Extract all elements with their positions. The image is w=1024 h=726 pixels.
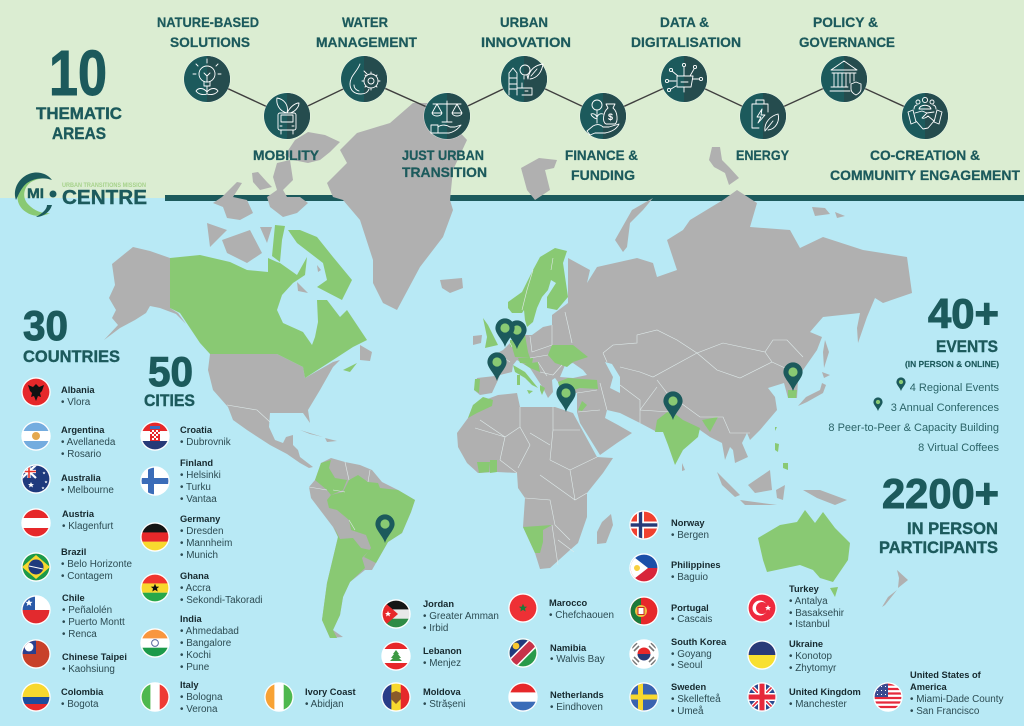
country: Ghana	[140, 572, 262, 603]
cities: • Abidjan	[305, 699, 344, 710]
cities: Sweden	[671, 682, 706, 692]
icon: city, bulb and leaf	[500, 56, 548, 102]
cities: • Munich	[180, 550, 218, 561]
cities: • Renca	[62, 629, 97, 640]
theme: Urban innovation	[481, 14, 571, 102]
cities: Portugal	[671, 603, 709, 613]
country: Philippines	[629, 553, 721, 583]
flag: Turkey	[747, 593, 777, 623]
flag: Germany	[140, 522, 170, 552]
headline: 10 thematic areas: AREAS	[52, 125, 106, 143]
flag: Ivory Coast	[264, 682, 294, 712]
flag: Marocco	[508, 593, 538, 623]
cities: Netherlands	[550, 690, 604, 700]
flag: Namibia	[508, 638, 538, 668]
cities: • Eindhoven	[550, 702, 603, 713]
cities: Chile	[62, 593, 85, 603]
header background	[0, 0, 1024, 198]
theme: Data and digitalisation	[631, 14, 741, 102]
label: JUST URBAN	[402, 147, 484, 163]
cities: United Kingdom	[789, 687, 861, 697]
theme: Policy and governance	[799, 14, 895, 102]
logo: MI Centre: URBAN TRANSITIONS MISSION	[62, 183, 146, 189]
cities: • Bogota	[61, 699, 99, 710]
pin: India	[663, 391, 683, 420]
panel: participants	[879, 470, 999, 557]
cities: Philippines	[671, 560, 721, 570]
cities: America	[910, 682, 948, 692]
cities: Chinese Taipei	[62, 652, 127, 662]
icon: bank and shield	[820, 56, 868, 102]
country: Ukraine	[747, 639, 837, 674]
cities: Colombia	[61, 687, 104, 697]
cities: • Sekondi-Takoradi	[180, 595, 262, 606]
cities: United States of	[910, 670, 982, 680]
sea background	[0, 198, 1024, 726]
label: ENERGY	[736, 147, 790, 163]
country: Jordan	[381, 599, 499, 634]
label: MOBILITY	[253, 147, 320, 163]
pin: Spain	[487, 352, 507, 381]
logo: MI Centre: CENTRE	[62, 187, 147, 209]
country: Austria	[21, 508, 113, 538]
flag: Chile	[21, 595, 51, 625]
cities: • Istanbul	[789, 619, 830, 630]
cities: • Peñalolén	[62, 605, 112, 616]
icon: water drop and gear	[340, 56, 388, 102]
cities: • Rosario	[61, 449, 102, 460]
cities: • Bergen	[671, 530, 709, 541]
pin: UK	[507, 320, 527, 349]
country: Moldova	[381, 682, 465, 712]
cities: Ivory Coast	[305, 687, 356, 697]
label: URBAN	[500, 14, 548, 30]
country: United States of America	[873, 670, 1004, 717]
cities: • Verona	[180, 704, 218, 715]
flag: Italy	[140, 682, 170, 712]
cities: • Chefchaouen	[549, 610, 614, 621]
events list: 3 Annual Conferences	[891, 402, 999, 414]
flag: Netherlands	[508, 682, 538, 712]
cities: • Greater Amman	[423, 611, 499, 622]
headline: 10 thematic areas: 10	[49, 37, 107, 109]
headline: 50 cities	[144, 348, 195, 410]
cities: • Melbourne	[61, 485, 114, 496]
headline: 30 countries	[23, 302, 120, 366]
map pins	[375, 318, 803, 543]
headline: 30 countries: 30	[23, 302, 68, 349]
cities: South Korea	[671, 637, 727, 647]
cities: • Mannheim	[180, 538, 232, 549]
country: Netherlands	[508, 682, 604, 713]
country: Norway	[629, 510, 709, 541]
country: South Korea	[629, 637, 727, 671]
icon: scales on hand	[424, 92, 470, 140]
cities: • Klagenfurt	[62, 521, 113, 532]
cities: • Konotop	[789, 651, 832, 662]
cities: Moldova	[423, 687, 462, 697]
flag: Albania	[21, 377, 51, 407]
country: Brazil	[21, 547, 132, 582]
cities: Marocco	[549, 598, 588, 608]
cities: • Bangalore	[180, 638, 232, 649]
cities: • Walvis Bay	[550, 654, 605, 665]
cities: Croatia	[180, 425, 213, 435]
icon: battery and leaf	[740, 92, 786, 140]
cities: Jordan	[423, 599, 454, 609]
cities: • San Francisco	[910, 706, 980, 717]
flag: Australia	[21, 464, 51, 494]
headline: 10 thematic areas	[36, 37, 122, 143]
map: gray land	[104, 103, 912, 638]
cities: • Basaksehir	[789, 608, 845, 619]
cities: • Avellaneda	[61, 437, 116, 448]
connector line between theme circles	[207, 79, 925, 116]
cities: • Dresden	[180, 526, 224, 537]
cities: • Vlora	[61, 397, 91, 408]
cities: Namibia	[550, 643, 587, 653]
label: NATURE-BASED	[157, 14, 259, 30]
cities: • Miami-Dade County	[910, 694, 1004, 705]
cities: • Skellefteå	[671, 694, 721, 705]
panel: events	[828, 290, 999, 454]
icon: bus and leaf	[264, 92, 310, 140]
cities: Ukraine	[789, 639, 823, 649]
flag: Colombia	[21, 682, 51, 712]
pin: Eastern Mediterranean	[556, 383, 576, 412]
cities: Lebanon	[423, 646, 462, 656]
cities: • Menjez	[423, 658, 461, 669]
label: POLICY &	[813, 14, 878, 30]
cities: • Accra	[180, 583, 211, 594]
map: participating countries	[170, 225, 850, 638]
country: United Kingdom	[747, 682, 861, 712]
cities: • Kaohsiung	[62, 664, 115, 675]
label: WATER	[342, 14, 388, 30]
pin: Germany	[495, 318, 515, 347]
cities: • Bologna	[180, 692, 223, 703]
flag: Sweden	[629, 682, 659, 712]
icon: bulb and plant	[184, 56, 230, 102]
country: Germany	[140, 514, 232, 561]
label: INNOVATION	[481, 34, 571, 50]
theme: Co-creation and community engagement	[830, 92, 1020, 183]
country: Australia	[21, 464, 114, 496]
headline: 50 cities: CITIES	[144, 392, 195, 410]
country: Ivory Coast	[264, 682, 356, 712]
cities: • Pune	[180, 662, 210, 673]
cities: Ghana	[180, 571, 210, 581]
cities: • Belo Horizonte	[61, 559, 132, 570]
theme: Energy	[736, 92, 790, 163]
cities: • Puerto Montt	[62, 617, 125, 628]
cities: • Contagem	[61, 571, 113, 582]
panel: participants: 2200+	[882, 470, 999, 517]
flag: Croatia	[140, 421, 170, 451]
pin: South Korea	[783, 362, 803, 391]
cities: • Strășeni	[423, 699, 465, 710]
events count: 40+	[928, 290, 999, 337]
cities: Albania	[61, 385, 95, 395]
theme: Mobility	[253, 92, 320, 163]
logo: MI Centre	[15, 173, 147, 217]
world map	[104, 103, 912, 638]
country: Argentina	[21, 421, 116, 460]
cities: • Antalya	[789, 596, 828, 607]
label: COMMUNITY ENGAGEMENT	[830, 167, 1020, 183]
flag: Ghana	[140, 573, 170, 603]
cities: India	[180, 614, 203, 624]
country: Colombia	[21, 682, 104, 712]
cities: • Turku	[180, 482, 211, 493]
flag: Finland	[140, 466, 170, 496]
country: India	[140, 614, 239, 673]
cities: Argentina	[61, 425, 105, 435]
cities: • Umeå	[671, 706, 704, 717]
cities: • Manchester	[789, 699, 848, 710]
cities: • Ahmedabad	[180, 626, 239, 637]
theme: Nature-based solutions	[157, 14, 259, 102]
cities: • Irbid	[423, 623, 448, 634]
country: Lebanon	[381, 641, 462, 671]
cities: • Dubrovnik	[180, 437, 231, 448]
flag: Austria	[21, 508, 51, 538]
cities: Italy	[180, 680, 199, 690]
flag: Philippines	[629, 553, 659, 583]
flag: Jordan	[381, 599, 411, 629]
flag: Lebanon	[381, 641, 411, 671]
country: Chile	[21, 593, 125, 640]
label: MANAGEMENT	[316, 34, 417, 50]
cities: • Seoul	[671, 660, 702, 671]
events list: 4 Regional Events	[910, 382, 999, 394]
headline: 10 thematic areas: THEMATIC	[36, 105, 122, 123]
country: Namibia	[508, 638, 605, 668]
icon: people and handshake	[902, 92, 948, 140]
cities: • Goyang	[671, 649, 712, 660]
country: Sweden	[629, 682, 721, 717]
logo: MI Centre: MI	[27, 186, 44, 201]
label: GOVERNANCE	[799, 34, 895, 50]
panel: participants: IN PERSON	[907, 520, 998, 538]
cities: • Cascais	[671, 614, 712, 625]
headline: 50 cities: 50	[148, 348, 193, 395]
cities: • Kochi	[180, 650, 211, 661]
country: Albania	[21, 377, 95, 408]
label: FUNDING	[571, 167, 635, 183]
icon: small pin	[873, 397, 883, 411]
icon: small pin	[896, 377, 906, 391]
flag: Chinese Taipei	[21, 639, 51, 669]
cities: Germany	[180, 514, 221, 524]
map: country borders	[227, 258, 803, 565]
theme: Just urban transition	[402, 92, 487, 180]
flag: United Kingdom	[747, 682, 777, 712]
icon: money bag on hand: $	[608, 112, 613, 122]
flag: Argentina	[21, 421, 51, 451]
icon: chip with nodes	[660, 56, 708, 102]
cities: Turkey	[789, 584, 820, 594]
country: Croatia	[140, 421, 231, 451]
flag: Brazil	[21, 552, 51, 582]
country: Chinese Taipei	[21, 639, 127, 675]
label: TRANSITION	[402, 164, 487, 180]
cities: • Zhytomyr	[789, 663, 837, 674]
events heading: EVENTS	[936, 338, 998, 356]
flag: Moldova	[381, 682, 411, 712]
flag: Ukraine	[747, 640, 777, 670]
flag: Norway	[629, 510, 659, 540]
flag: South Korea	[629, 639, 659, 669]
flag: India	[140, 628, 170, 658]
cities: • Vantaa	[180, 494, 217, 505]
label: SOLUTIONS	[170, 34, 250, 50]
country: Italy	[140, 682, 222, 712]
events subheading: (IN PERSON & ONLINE)	[905, 359, 999, 369]
cities: Austria	[62, 509, 95, 519]
cities: Finland	[180, 458, 213, 468]
header divider strip	[165, 195, 1024, 201]
cities: Australia	[61, 473, 102, 483]
label: FINANCE &	[565, 147, 638, 163]
events list: 8 Virtual Coffees	[918, 442, 999, 454]
panel: participants: PARTICIPANTS	[879, 539, 998, 557]
country: Portugal	[629, 596, 712, 626]
label: DIGITALISATION	[631, 34, 741, 50]
label: DATA &	[660, 14, 709, 30]
cities: Norway	[671, 518, 705, 528]
country: Finland	[140, 458, 221, 505]
label: CO-CREATION &	[870, 147, 980, 163]
flag: Portugal	[629, 596, 659, 626]
pin: Brazil	[375, 514, 395, 543]
cities: • Helsinki	[180, 470, 221, 481]
country: Turkey	[747, 584, 845, 630]
theme: Water management	[316, 14, 417, 102]
events list: 8 Peer-to-Peer & Capacity Building	[828, 422, 999, 434]
map: seas	[560, 362, 620, 393]
headline: 30 countries: COUNTRIES	[23, 348, 120, 366]
country: Marocco	[508, 593, 614, 623]
theme: Finance and funding	[565, 92, 638, 183]
cities: Brazil	[61, 547, 86, 557]
cities: • Baguio	[671, 572, 708, 583]
flag: United States of America	[873, 682, 903, 712]
